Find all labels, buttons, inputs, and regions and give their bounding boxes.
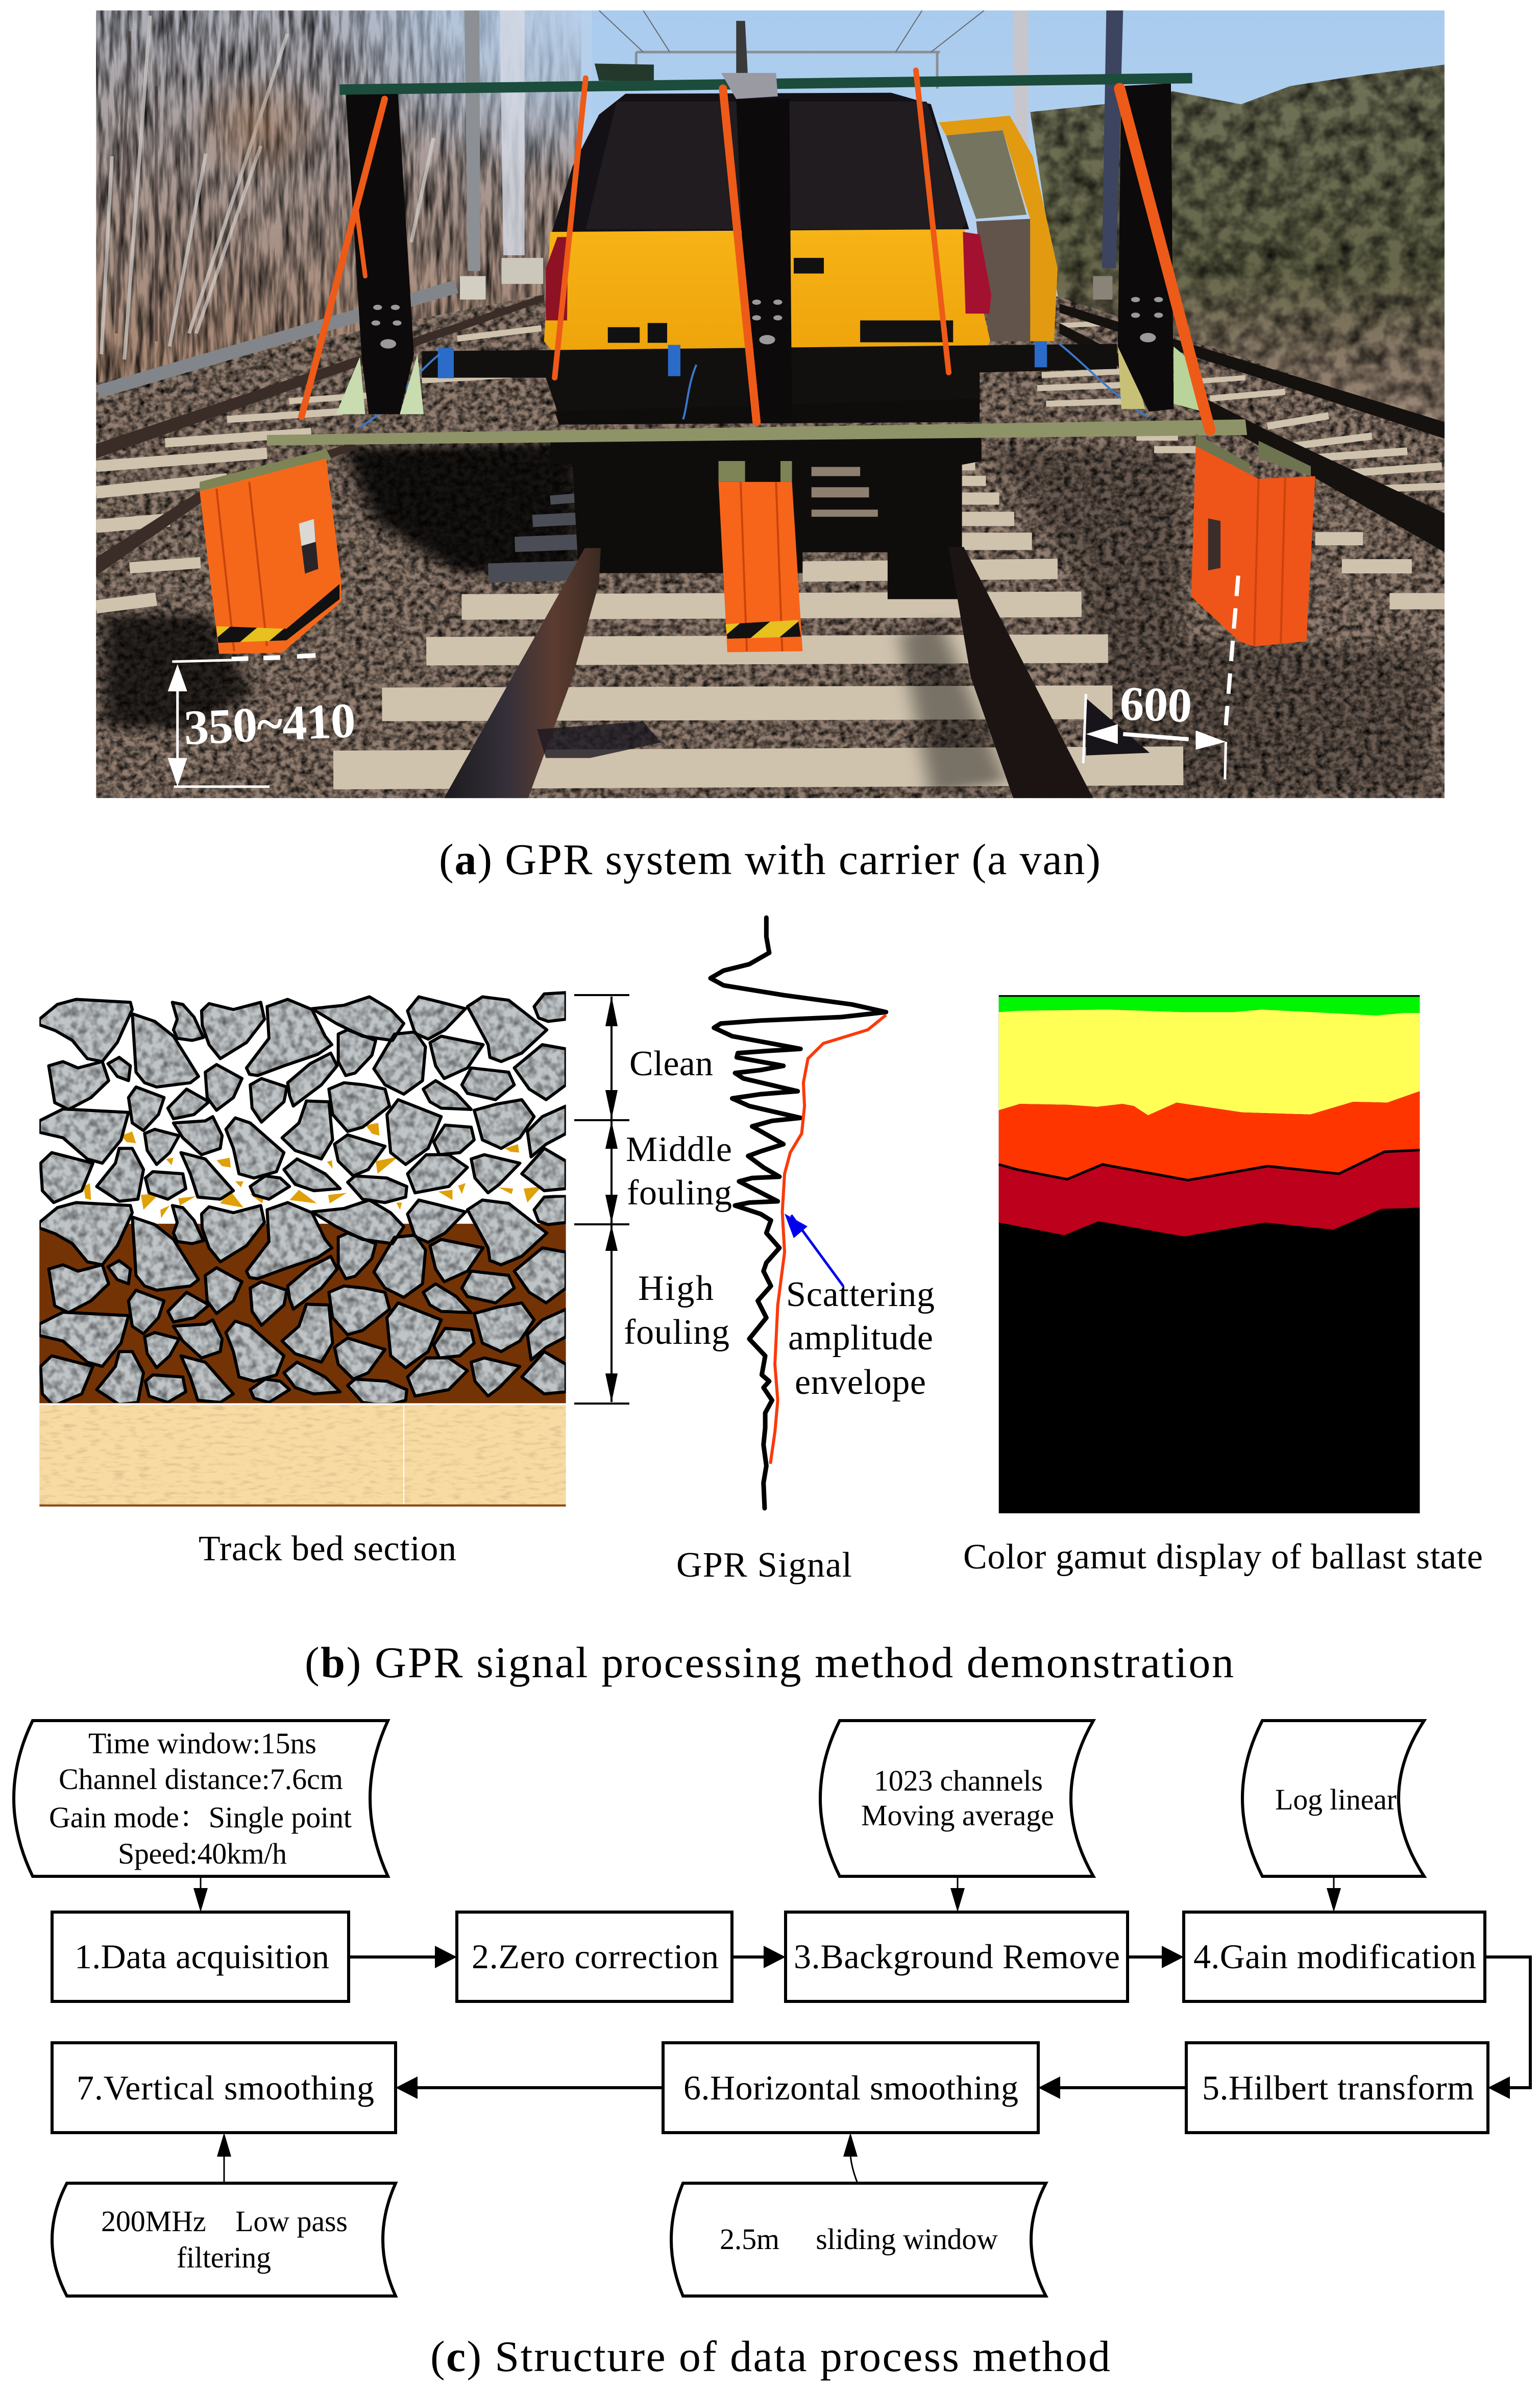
undercarriage [550, 437, 982, 599]
step 5: 5.Hilbert transform [1202, 2068, 1474, 2107]
photo: van carrying GPR antennas on a rail track [96, 10, 1446, 798]
side track rails [96, 295, 544, 576]
panel: (b) GPR signal processing demonstration [39, 917, 1483, 1687]
label: Scattering amplitude envelope: amplitude [788, 1318, 933, 1358]
step 4: 4.Gain modification [1193, 1937, 1476, 1976]
input: sliding window [671, 2183, 1046, 2296]
gold fouling flecks [84, 1123, 542, 1218]
van [939, 116, 1058, 341]
annotation: width dimension 600 [1083, 576, 1238, 780]
caption (b): (b) GPR signal processing method demonstration [305, 1638, 1234, 1687]
color gamut display [999, 995, 1420, 1513]
input: acquisition parameters [14, 1721, 388, 1876]
step 7: 7.Vertical smoothing [77, 2068, 374, 2107]
straps [302, 70, 1210, 430]
step 4 [1184, 1912, 1485, 2001]
step 1: 1.Data acquisition [75, 1937, 329, 1976]
label: High fouling: fouling [624, 1313, 729, 1352]
input: low pass filter: 200MHz Low pass [101, 2205, 348, 2238]
step 3: 3.Background Remove [794, 1937, 1120, 1976]
input: acquisition parameters: Time window:15ns [88, 1727, 316, 1760]
input: low pass filter: filtering [177, 2241, 271, 2274]
arrows between inputs and steps [193, 1876, 1341, 2183]
arrows between steps [349, 1946, 1530, 2099]
caption (a): (a) GPR system with carrier (a van) [439, 835, 1101, 884]
catenary posts [465, 10, 480, 271]
envelope trace [770, 1015, 886, 1464]
input: acquisition parameters: Channel distance:7.6cm [59, 1762, 343, 1796]
panel: (c) data processing flowchart [14, 1721, 1530, 2381]
label: Scattering amplitude envelope [786, 1275, 935, 1402]
label: Scattering amplitude envelope: envelope [795, 1363, 926, 1402]
step 7 [52, 2043, 396, 2133]
step 1 [52, 1912, 349, 2001]
antenna boxes [200, 449, 332, 492]
arrow: pointer to envelope [785, 1214, 843, 1286]
caption: Track bed section: Track bed section [199, 1529, 456, 1568]
input: acquisition parameters: Gain mode：Single point [49, 1801, 352, 1834]
dimension brackets: clean, middle, high fouling [574, 995, 629, 1404]
GPR signal waveform with envelope [711, 917, 886, 1508]
label: Scattering amplitude envelope: Scattering [786, 1275, 935, 1314]
step 2 [457, 1912, 732, 2001]
label: Middle fouling: fouling [627, 1173, 732, 1213]
caption (c): (c) Structure of data process method [430, 2332, 1110, 2381]
label: High fouling: High [638, 1269, 714, 1308]
step 6: 6.Horizontal smoothing [683, 2068, 1018, 2107]
track bed section illustration [39, 993, 566, 1507]
step 6 [663, 2043, 1038, 2133]
panel: (a) GPR system photo [96, 10, 1446, 884]
step 2: 2.Zero correction [472, 1937, 719, 1976]
input: background removal parameters: 1023 channels [874, 1764, 1043, 1797]
input: acquisition parameters: Speed:40km/h [118, 1837, 287, 1870]
caption: Color gamut display: Color gamut display of ballast state [963, 1537, 1483, 1577]
sleepers [96, 323, 1446, 770]
frame posts and feet [336, 357, 365, 414]
label: Middle fouling: Middle [626, 1130, 732, 1169]
signal trace [711, 917, 886, 1508]
step 5 [1186, 2043, 1488, 2133]
label: Middle fouling [626, 1130, 732, 1213]
label: 350~410: 350~410 [183, 693, 357, 755]
annotation: height dimension 350~410 [168, 656, 315, 787]
label: Clean: Clean [629, 1044, 713, 1083]
label: 600: 600 [1119, 676, 1193, 733]
input: background removal parameters [820, 1721, 1093, 1876]
input: low pass filter [52, 2183, 396, 2296]
caption: GPR Signal: GPR Signal [676, 1545, 852, 1585]
input: background removal parameters: Moving average [861, 1799, 1054, 1832]
label: High fouling [624, 1269, 729, 1352]
step 3 [786, 1912, 1128, 2001]
input: sliding window: 2.5m sliding window [720, 2222, 998, 2256]
main rails [444, 548, 601, 798]
input: gain type: Log linear [1275, 1783, 1397, 1816]
input: gain type [1242, 1721, 1424, 1876]
